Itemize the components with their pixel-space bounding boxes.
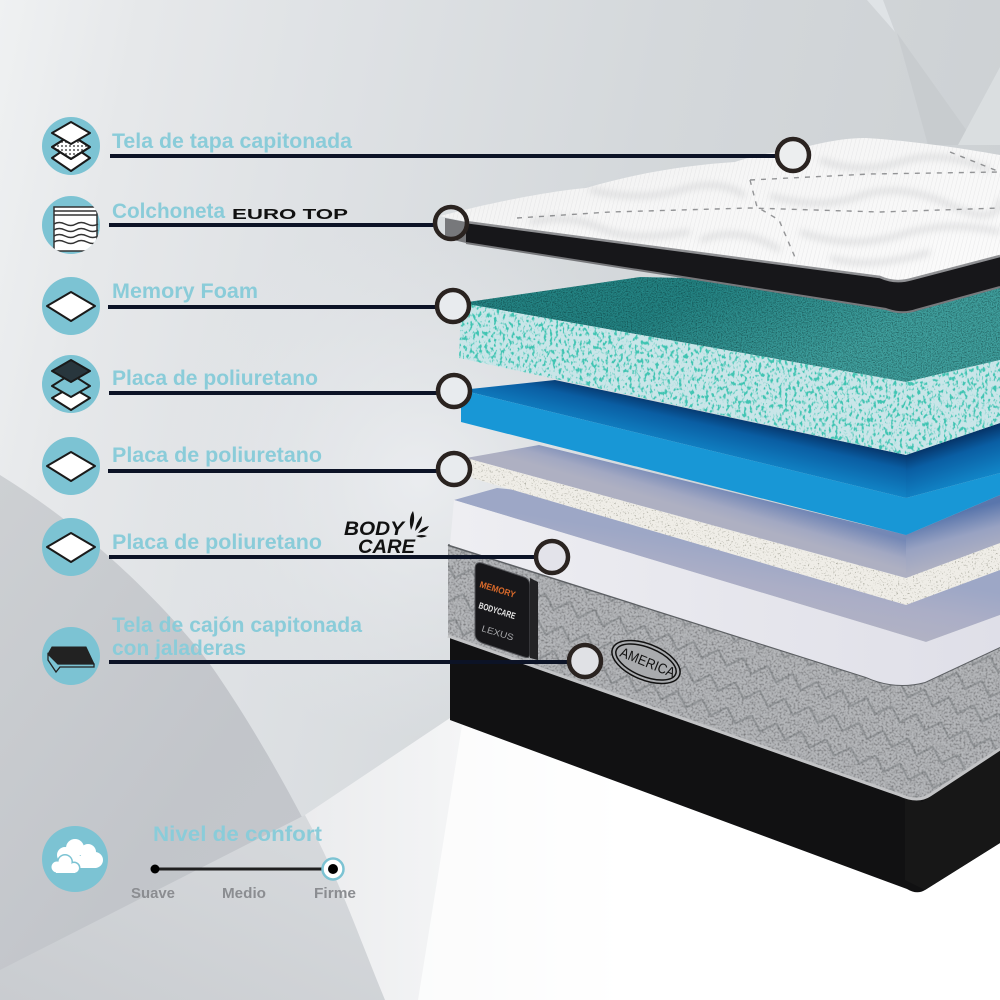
layer item: Colchoneta Euro Top [42, 196, 348, 254]
layer item: Tela de cajón capitonada con jaladeras: con jaladeras [112, 637, 246, 660]
logo: Body Care: BODY [344, 519, 407, 540]
foam layer: memory foam teal [459, 277, 1000, 455]
brand tag: BODYCARE [477, 600, 517, 621]
icon: foam sheet [42, 277, 100, 335]
brand tag [475, 563, 538, 660]
icon: stacked quilted layers [42, 117, 100, 175]
icon: foam sheet [42, 518, 100, 576]
logo: Euro Top: EURO TOP [232, 206, 348, 223]
comfort level panel: Nivel de confort [153, 823, 322, 846]
layer item: Placa de poliuretano 2: Placa de poliuretano [112, 444, 322, 467]
comfort level panel: Medio [222, 885, 266, 902]
comfort level panel [42, 823, 356, 902]
base: black box spring [450, 637, 1000, 892]
layer item: Tela de tapa capitonada: Tela de tapa capitonada [112, 130, 352, 153]
mattress top panel [440, 138, 1000, 312]
foam layer: upper white [466, 445, 1000, 605]
layer item: Tela de cajón capitonada con jaladeras [42, 614, 362, 685]
layer item: Memory Foam: Memory Foam [112, 280, 258, 303]
leader lines and markers [108, 139, 809, 677]
icon: stacked dark sheets [42, 355, 100, 413]
comfort level panel: Suave [131, 885, 175, 902]
layer item: Placa de poliuretano 1 [42, 355, 318, 413]
layer item: Tela de cajón capitonada con jaladeras: Tela de cajón capitonada [112, 614, 362, 637]
brand tag: MEMORY [478, 579, 517, 600]
foam layer: lower white [450, 488, 1000, 685]
icon: foam sheet [42, 437, 100, 495]
mattress layers [440, 138, 1000, 892]
layer item: Memory Foam [42, 277, 258, 335]
layer item: Tela de tapa capitonada [42, 117, 352, 175]
box spring quilted grey fabric [448, 545, 1000, 800]
layer item: Placa de poliuretano 1: Placa de poliuretano [112, 367, 318, 390]
logo: Body Care [344, 511, 429, 558]
layer item: Placa de poliuretano 2 [42, 437, 322, 495]
icon: clouds [42, 826, 108, 892]
layer item: Placa de poliuretano Body Care: Placa de poliuretano [112, 531, 322, 554]
layer item: Placa de poliuretano Body Care [42, 511, 429, 576]
foam layer: blue [461, 380, 1000, 535]
America logo [606, 632, 686, 692]
logo: Body Care: CARE [358, 537, 416, 558]
America logo: AMERICA [618, 644, 678, 681]
comfort level panel: Firme [314, 885, 356, 902]
icon: mattress cross-section [42, 196, 100, 254]
layer item: Colchoneta Euro Top: Colchoneta [112, 200, 225, 223]
brand tag: LEXUS [480, 623, 515, 643]
comfort slider [150, 858, 344, 880]
icon: box spring [42, 627, 100, 685]
